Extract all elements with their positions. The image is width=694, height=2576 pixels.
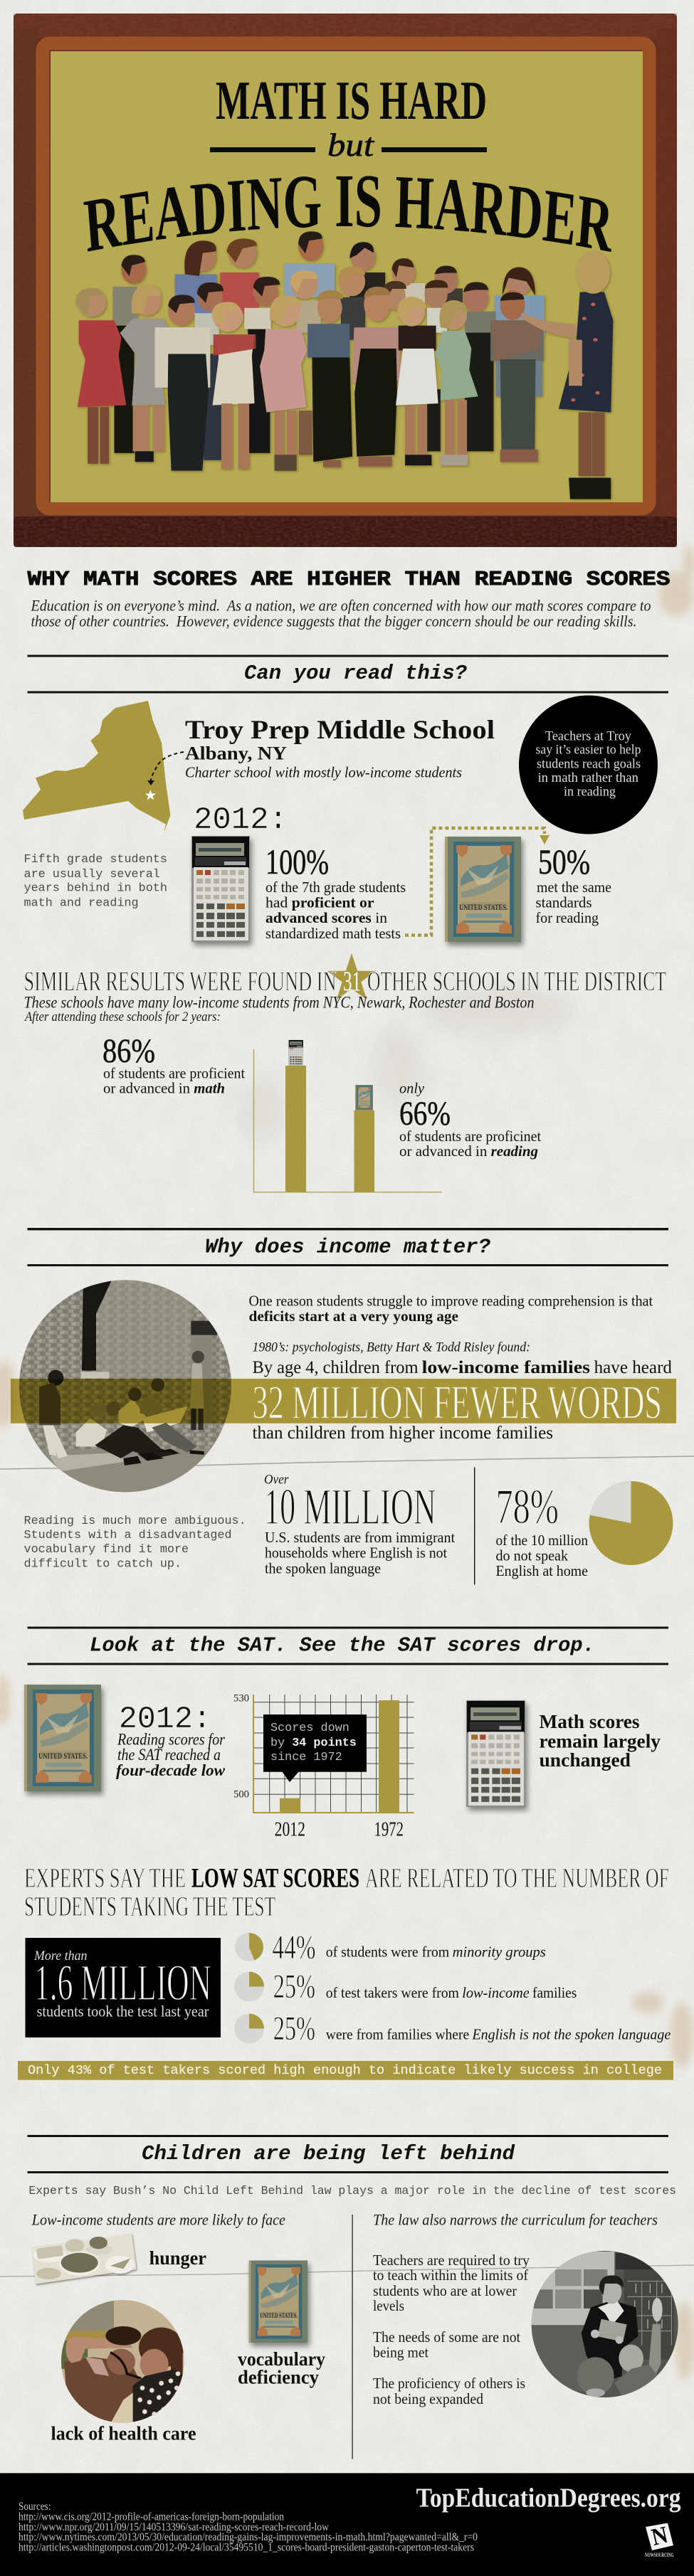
stat row: 25 percent low income: 25% xyxy=(273,1968,315,2005)
text: needs not met xyxy=(373,2328,520,2361)
left kid xyxy=(39,1370,68,1458)
logo: Nowsourcing: NOWSOURCING xyxy=(645,2552,673,2558)
sources list: http://www.cis.org/2012-profile-of-americas-foreign-born-population xyxy=(19,2511,284,2523)
title: but with rules: but xyxy=(327,127,374,163)
label: vocabulary deficiency: vocabulary xyxy=(238,2348,325,2370)
hero panel: framed poster xyxy=(14,14,677,547)
label: lack of health care: lack of health care xyxy=(51,2423,196,2444)
icon: book: UNITED STATES. xyxy=(260,2313,298,2320)
stat: 78 percent: English at home xyxy=(495,1562,588,1579)
text: teachers required: Teachers are required to try xyxy=(373,2252,530,2269)
callout: teachers at Troy: say it’s easier to help xyxy=(535,743,641,758)
text: by age 4 xyxy=(252,1358,672,1377)
text: by age 4: By age 4, children from xyxy=(252,1358,419,1377)
subheading: these schools xyxy=(23,994,535,1024)
stat row: 25 percent low income: families xyxy=(532,1984,577,2001)
school name block: Troy Prep Middle School xyxy=(185,716,495,745)
back row xyxy=(113,231,545,453)
text: proficiency not expanded: The proficiency of others is xyxy=(373,2375,525,2392)
bar chart: SAT scores: 530 xyxy=(233,1693,249,1705)
stat: 66 percent xyxy=(399,1080,541,1160)
stat: 100 percent math: 100% xyxy=(265,842,329,881)
text: math scores unchanged: unchanged xyxy=(540,1749,631,1771)
left column heading: Low-income students are more likely to face xyxy=(31,2211,285,2228)
school name block: Albany, NY xyxy=(185,743,287,764)
note: fifth grade students: years behind in both xyxy=(24,882,167,895)
logo: Nowsourcing xyxy=(645,2522,673,2558)
callout: teachers at Troy: in math rather than xyxy=(538,770,638,785)
sources list: http://www.npr.org/2011/09/15/140513396/sat-reading-scores-reach-record-low xyxy=(19,2521,329,2533)
label: vocabulary deficiency: deficiency xyxy=(238,2366,319,2387)
stat: 10 million: households where English is not xyxy=(265,1544,447,1561)
stat: 66 percent: 66% xyxy=(399,1095,451,1133)
stat row: 25 percent low income: of test takers were from xyxy=(326,1984,459,2001)
stat: 78 percent: do not speak xyxy=(495,1547,568,1564)
school name block: Charter school with mostly low-income students xyxy=(185,764,462,781)
stat: 50 percent reading: met the same xyxy=(537,879,611,896)
note: reading is ambiguous: difficult to catch up. xyxy=(24,1558,182,1571)
teacher xyxy=(520,251,613,499)
heading: experts say: STUDENTS TAKING THE TEST xyxy=(24,1892,275,1922)
text: 2012 reading scores: Reading scores for xyxy=(117,1731,226,1749)
photo: food tray xyxy=(32,2233,137,2284)
intro text: Education is on everyone’s mind. As a nation, we are often concerned with how our math scores compare to xyxy=(31,597,651,615)
photo: teacher at blackboard xyxy=(532,2251,680,2400)
heading: similar results with star: 31 xyxy=(343,966,361,997)
bar chart: SAT scores xyxy=(233,1693,414,1841)
intro text xyxy=(31,597,651,630)
note: reading is ambiguous: vocabulary find it more xyxy=(24,1543,189,1557)
panel: 1.6 million: students took the test last year xyxy=(37,2002,209,2020)
stat: 86 percent xyxy=(102,1032,245,1097)
stat: 10 million: Over xyxy=(264,1473,289,1488)
stat row: 25 percent language: English is not the spoken language xyxy=(472,2026,671,2043)
label: vocabulary deficiency xyxy=(238,2348,325,2387)
heading: similar results with star xyxy=(24,953,666,1000)
stat: 86 percent: of students are proficient xyxy=(103,1065,245,1082)
right girl xyxy=(190,1351,204,1430)
bar chart: SAT scores: 1972 xyxy=(374,1818,404,1841)
title: math is hard: MATH IS HARD xyxy=(216,70,487,131)
text: 2012 reading scores: four-decade low xyxy=(116,1761,226,1779)
panel: 1.6 million: More than xyxy=(33,1949,87,1963)
stat: 10 million: the spoken language xyxy=(265,1559,381,1576)
note: reading is ambiguous: Reading is much more ambiguous. xyxy=(24,1515,246,1528)
icon: book: UNITED STATES. xyxy=(459,902,508,912)
heading: experts say xyxy=(24,1863,669,1922)
icon: book: UNITED STATES. xyxy=(38,1751,88,1761)
ochre panel xyxy=(51,51,643,502)
seated kids xyxy=(76,1378,204,1465)
school name block xyxy=(185,716,495,781)
intro text: those of other countries. However, evidence suggests that the bigger concern should be our reading skills. xyxy=(31,613,636,630)
right column heading: The law also narrows the curriculum for teachers xyxy=(373,2211,658,2228)
stat row: 44 percent: 44% xyxy=(272,1929,316,1966)
footer xyxy=(0,2473,694,2576)
front row xyxy=(76,285,544,471)
callout: scores down: since 1972 xyxy=(270,1751,342,1764)
stat: 100 percent math: of the 7th grade students xyxy=(265,879,406,896)
text: math scores unchanged xyxy=(540,1711,661,1771)
text: teachers required: levels xyxy=(373,2297,404,2314)
pie chart: 78 percent xyxy=(589,1481,673,1565)
text: experts say Bush: Experts say Bush’s No Child Left Behind law plays a major role in the decline of test scores xyxy=(28,2185,676,2198)
note: reading is ambiguous: Students with a disadvantaged xyxy=(24,1529,232,1542)
stat: 78 percent: 78% xyxy=(495,1480,559,1535)
panel: 1.6 million: 1.6 MILLION xyxy=(34,1954,211,2011)
callout: teachers at Troy: Teachers at Troy xyxy=(545,729,631,744)
callout: teachers at Troy xyxy=(519,696,658,834)
sources list: Sources: xyxy=(19,2501,51,2513)
bar chart: SAT scores: 500 xyxy=(233,1789,249,1801)
banner: only 43 percent: Only 43% of test takers scored high enough to indicate likely success in college xyxy=(28,2064,662,2078)
middle row xyxy=(195,267,496,460)
stat: 50 percent reading: for reading xyxy=(535,909,599,926)
stat: 100 percent math: had proficient or xyxy=(265,894,374,911)
stat row: 44 percent xyxy=(235,1929,546,1966)
section heading: can you read this: Can you read this? xyxy=(244,662,468,685)
text: teachers required: to teach within the limits of xyxy=(373,2267,528,2284)
callout: teachers at Troy: in reading xyxy=(564,785,616,800)
text: one reason: deficits start at a very young age xyxy=(249,1308,458,1325)
subheading: these schools: After attending these schools for 2 years: xyxy=(23,1009,221,1024)
note: fifth grade students: math and reading xyxy=(24,897,139,911)
text: teachers required xyxy=(373,2252,530,2314)
icon: book xyxy=(24,1685,101,1791)
stat: 78 percent xyxy=(495,1480,588,1579)
text: proficiency not expanded xyxy=(373,2375,525,2407)
section heading: look at the SAT: Look at the SAT. See the SAT scores drop. xyxy=(90,1634,595,1658)
text: one reason xyxy=(249,1293,653,1355)
stat: 66 percent: only xyxy=(399,1080,425,1097)
sources list: http://www.nytimes.com/2013/05/30/education/reading-gains-lag-improvements-in-math.html?pagewanted=all&_r=0 xyxy=(19,2531,478,2543)
callout: scores down: by 34 points xyxy=(270,1737,357,1750)
year 2012: 2012: xyxy=(194,802,288,838)
stat: 50 percent reading xyxy=(535,842,611,926)
map: New York state xyxy=(23,701,170,833)
panel: 1.6 million xyxy=(26,1938,221,2037)
text: math scores unchanged: Math scores xyxy=(540,1711,639,1732)
stat: 86 percent: or advanced in math xyxy=(103,1080,225,1097)
note: fifth grade students xyxy=(24,853,167,911)
stat: 50 percent reading: 50% xyxy=(538,842,590,881)
text: 2012 reading scores xyxy=(116,1702,226,1779)
icon: book xyxy=(445,837,521,942)
text: than children: than children from higher income families xyxy=(252,1424,553,1443)
arrow: Albany pointer xyxy=(147,752,184,785)
text: by age 4: low-income families xyxy=(422,1358,590,1377)
sources list: http://articles.washingtonpost.com/2012-09-24/local/35495510_1_scores-board-president-gaston-caperton-test-takers xyxy=(19,2541,474,2553)
text: proficiency not expanded: not being expanded xyxy=(373,2390,483,2407)
note: reading is ambiguous xyxy=(24,1515,246,1571)
main heading: WHY MATH SCORES ARE HIGHER THAN READING SCORES xyxy=(27,568,671,591)
gold band xyxy=(11,1379,676,1424)
stat: 86 percent: 86% xyxy=(102,1032,155,1070)
note: fifth grade students: Fifth grade students xyxy=(24,853,167,866)
heading: similar results with star: SIMILAR RESULTS WERE FOUND IN xyxy=(24,966,336,997)
title: but with rules xyxy=(210,127,487,163)
callout: teachers at Troy: students reach goals xyxy=(537,756,641,771)
photo: health care exam xyxy=(59,2298,187,2426)
text: math scores unchanged: remain largely xyxy=(540,1731,661,1752)
stat row: 25 percent low income: low-income xyxy=(462,1984,530,2001)
sources list xyxy=(19,2501,478,2553)
stat: 66 percent: or advanced in reading xyxy=(399,1143,538,1160)
text: 2012 reading scores: 2012: xyxy=(119,1702,211,1737)
title: reading is harder xyxy=(83,176,611,252)
photo: children and teacher xyxy=(76,231,613,499)
text: teachers required: students who are at lower xyxy=(373,2282,517,2299)
stat: 66 percent: of students are proficinet xyxy=(399,1128,541,1145)
icon: calculator xyxy=(466,1700,525,1807)
stat: 100 percent math: advanced scores in xyxy=(265,909,388,926)
label: hunger: hunger xyxy=(149,2247,206,2269)
stat row: 44 percent: minority groups xyxy=(453,1944,546,1961)
text: 2012 reading scores: the SAT reached a xyxy=(117,1746,221,1764)
heading: experts say: LOW SAT SCORES xyxy=(191,1863,359,1894)
logo: Nowsourcing: N xyxy=(649,2522,671,2551)
stat: 10 million xyxy=(264,1473,455,1576)
stat row: 25 percent low income xyxy=(234,1968,577,2005)
icon: book xyxy=(249,2260,307,2343)
stat: 78 percent: of the 10 million xyxy=(495,1532,588,1549)
callout: scores down xyxy=(263,1714,367,1782)
leather frame xyxy=(14,14,677,547)
section heading: why does income matter: Why does income matter? xyxy=(205,1236,491,1259)
text: by age 4: have heard xyxy=(594,1358,672,1377)
text: needs not met: being met xyxy=(373,2344,429,2361)
stat: 100 percent math xyxy=(265,842,406,942)
stat row: 25 percent language xyxy=(234,2010,671,2047)
text: one reason: 1980’s: psychologists, Betty Hart & Todd Risley found: xyxy=(252,1340,530,1355)
stat: 10 million: 10 MILLION xyxy=(264,1478,436,1535)
text: needs not met: The needs of some are not xyxy=(373,2328,520,2346)
bar chart: math vs reading xyxy=(253,1040,442,1192)
stat row: 25 percent language: were from families where xyxy=(326,2026,469,2043)
section heading: children left behind: Children are being left behind xyxy=(142,2142,515,2166)
stat: 50 percent reading: standards xyxy=(535,894,592,911)
stat row: 44 percent: of students were from xyxy=(326,1944,449,1961)
callout: scores down: Scores down xyxy=(270,1722,349,1735)
arrow: dotted connector xyxy=(405,828,550,935)
subheading: these schools: These schools have many low-income students from NYC, Newark, Rochester and Boston xyxy=(24,994,534,1012)
heading: experts say: EXPERTS SAY THE xyxy=(24,1863,186,1894)
title: reading is harder: READING IS HARDER xyxy=(83,176,611,252)
photo: children reading on curb xyxy=(19,1280,231,1493)
stat row: 25 percent language: 25% xyxy=(273,2010,315,2047)
text: one reason: One reason students struggle to improve reading comprehension is that xyxy=(249,1293,653,1310)
icon: calculator xyxy=(191,836,250,942)
bar chart: SAT scores: 2012 xyxy=(275,1818,305,1841)
stat: 10 million: U.S. students are from immigrant xyxy=(265,1529,455,1546)
stat: 100 percent math: standardized math tests xyxy=(265,925,401,942)
note: fifth grade students: are usually several xyxy=(24,868,160,881)
